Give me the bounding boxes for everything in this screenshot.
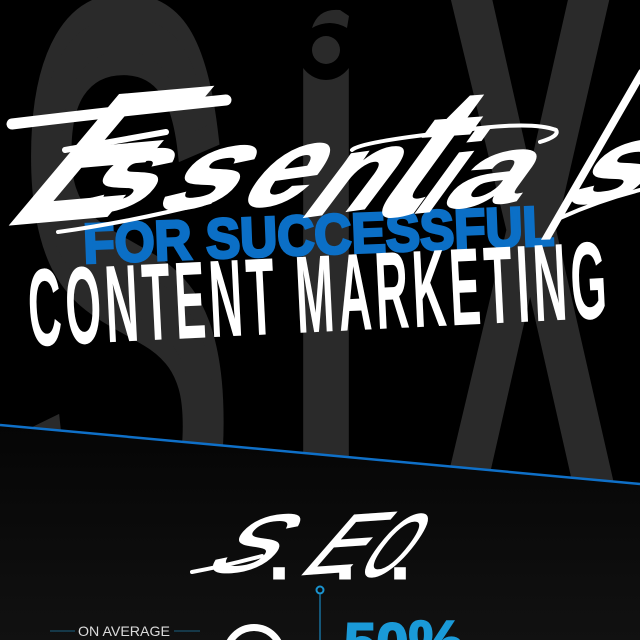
script heading: Essentials [0,28,640,290]
section title: S.E.O.: O [338,495,454,596]
icon: ring [226,628,282,640]
script heading: Essentials: s [132,100,304,237]
script heading: Essentials: a [420,108,585,232]
script heading: Essentials: n [277,101,453,244]
section title: S.E.O.: . [390,511,410,595]
script heading: Essentials: i [390,108,512,239]
script heading: Essentials: s [50,103,222,240]
background word: SIX [31,0,614,480]
section title: S.E.O.: S [185,496,329,591]
label: ON AVERAGE: ON AVERAGE [78,623,170,639]
script heading: Essentials: t [333,47,536,258]
section panel: S.E.O. [0,425,640,640]
section title: S.E.O.: E [280,493,418,593]
section title: S.E.O. [185,493,454,596]
subheading: FOR SUCCESSFUL: FOR SUCCESSFUL [82,194,555,275]
connector: dot and line [316,586,324,640]
section title: S.E.O.: . [335,511,355,595]
divider line [0,425,640,484]
heading: CONTENT MARKETING: CONTENT MARKETING [25,218,613,369]
brush sweep under S [192,556,262,572]
brush flourishes [12,100,640,232]
section title: S.E.O.: . [269,511,289,595]
script heading: Essentials: e [214,99,377,235]
